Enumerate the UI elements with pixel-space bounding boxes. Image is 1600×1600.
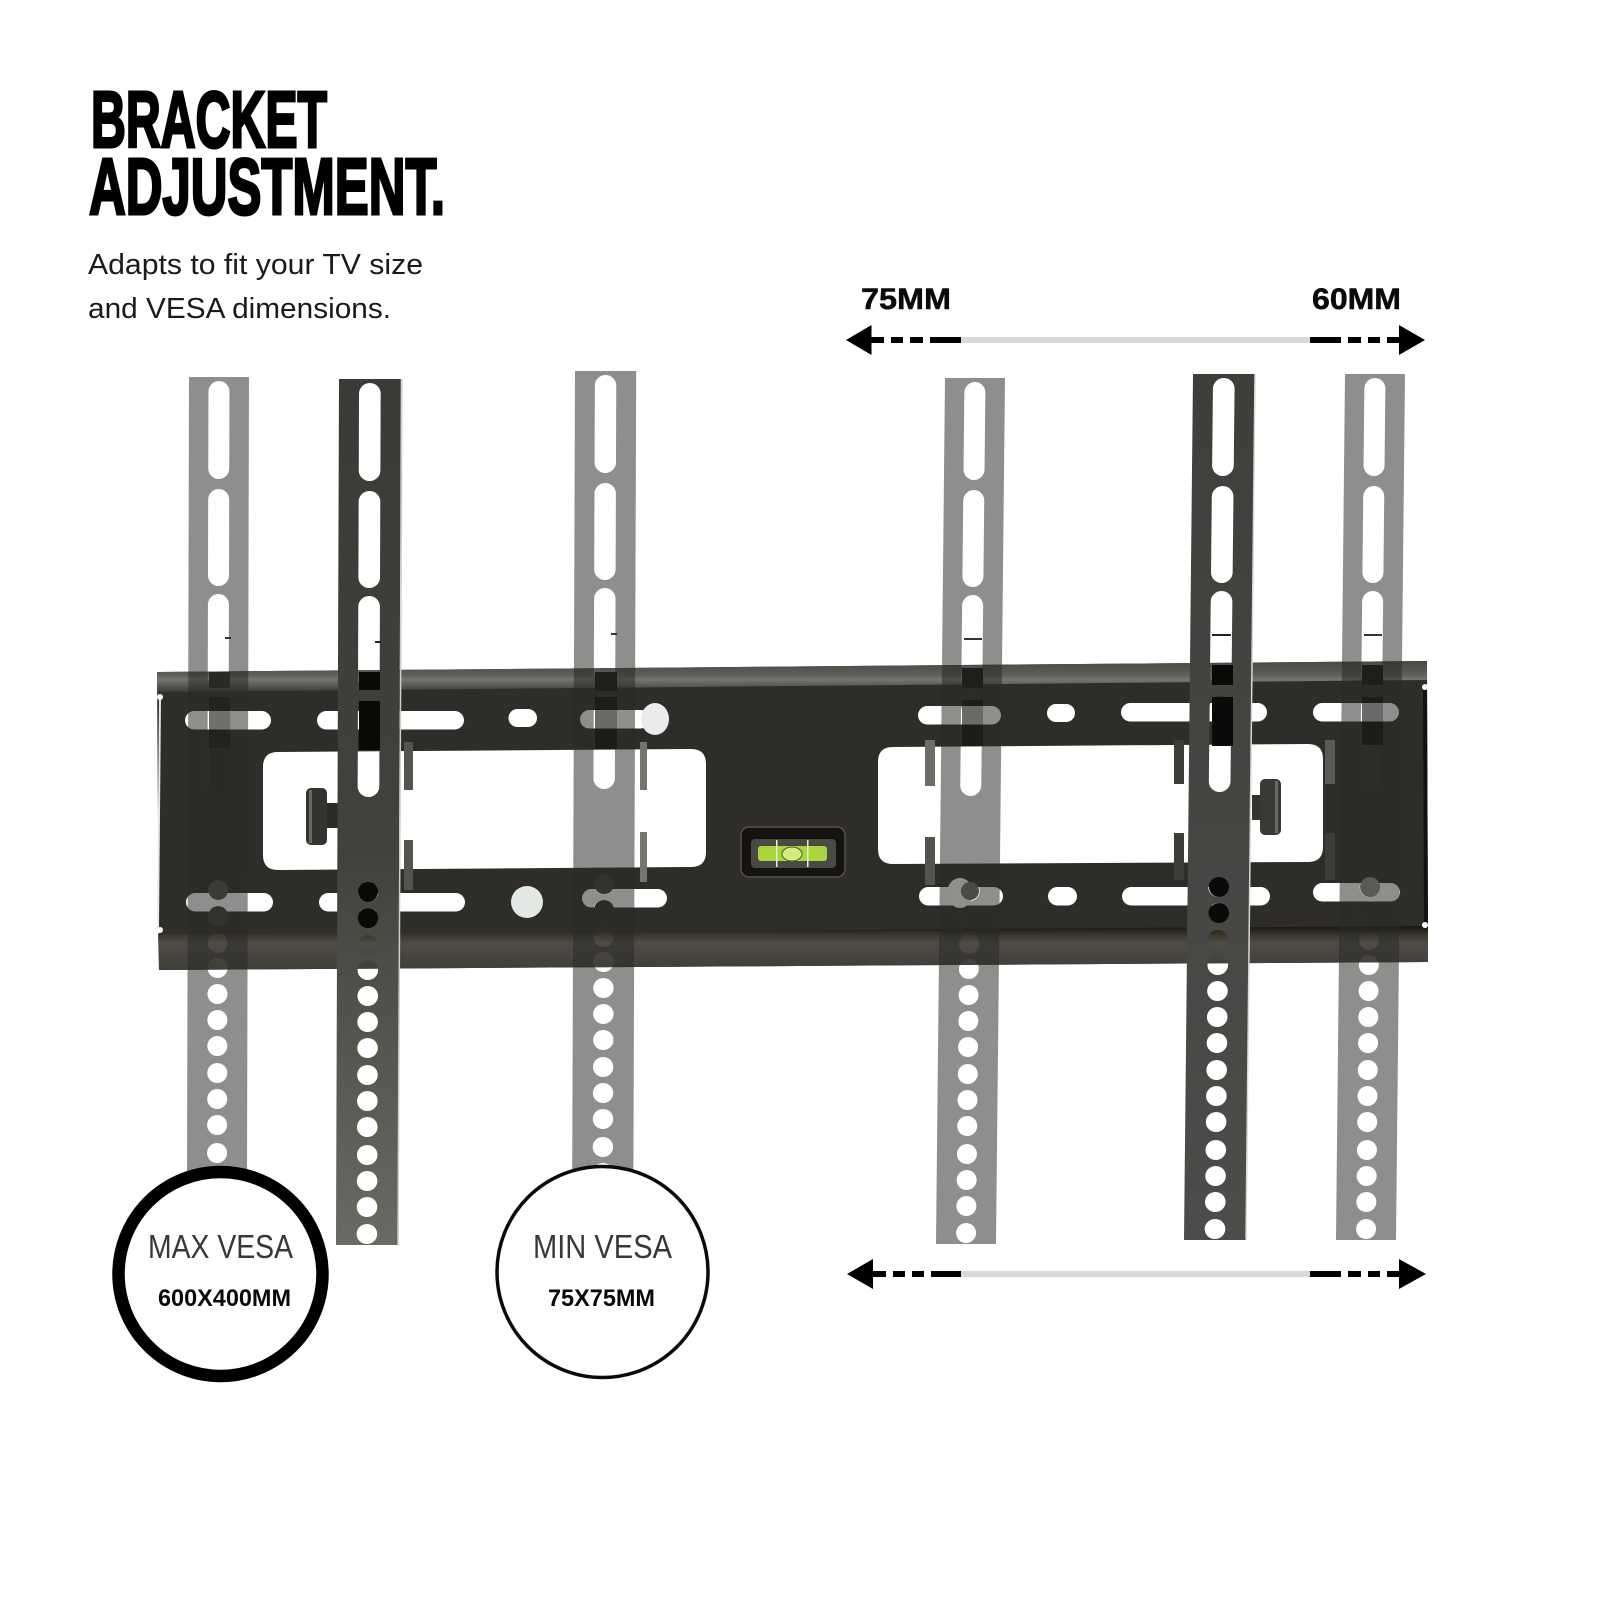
mounting slots bbox=[185, 703, 1400, 912]
plate corner notches bbox=[157, 684, 1428, 933]
mounting arm: left, max position solid bbox=[336, 379, 402, 1246]
left window bbox=[263, 749, 706, 870]
callout: max vesa: 600X400MM bbox=[158, 1285, 291, 1312]
spirit level bbox=[741, 827, 845, 877]
callout: min vesa: MIN VESA bbox=[533, 1228, 672, 1265]
title bbox=[89, 75, 445, 231]
tilt tabs bbox=[404, 740, 1335, 890]
title: BRACKET bbox=[91, 75, 327, 164]
wall plate bbox=[157, 661, 1428, 970]
screw: ghost bbox=[947, 878, 979, 908]
subtitle text: and VESA dimensions. bbox=[88, 293, 391, 325]
callout: max vesa bbox=[118, 1172, 322, 1376]
callout: min vesa bbox=[497, 1166, 708, 1378]
mounting arm: right side solid bbox=[1184, 374, 1255, 1240]
mounting arm: centre, min position ghost bbox=[572, 371, 636, 1237]
label: 60mm: 60MM bbox=[1312, 283, 1401, 316]
plate bottom lip bbox=[158, 926, 1428, 970]
title: ADJUSTMENT. bbox=[89, 142, 445, 231]
screw: lower bbox=[511, 886, 543, 918]
callout: max vesa: MAX VESA bbox=[148, 1228, 293, 1265]
right window bbox=[878, 744, 1323, 864]
screw: upper bbox=[641, 703, 669, 735]
plate left edge bbox=[158, 697, 160, 930]
plate top lip bbox=[157, 661, 1427, 692]
plate right edge bbox=[1425, 688, 1426, 925]
arrow: top double arrow bbox=[846, 325, 1425, 355]
mounting arm: far right ghost, 60mm bbox=[1336, 374, 1405, 1240]
subtitle text: Adapts to fit your TV size bbox=[88, 249, 423, 281]
tilt knob: left bbox=[306, 788, 341, 845]
label: 75mm: 75MM bbox=[861, 283, 951, 316]
callout: min vesa: 75X75MM bbox=[548, 1285, 655, 1312]
arrow: bottom double arrow bbox=[847, 1259, 1426, 1289]
mounting arm: far left, max position ghost bbox=[187, 377, 249, 1243]
tilt knob: right bbox=[1252, 779, 1281, 835]
subtitle text bbox=[88, 249, 423, 325]
mounting arm: right side ghost, 75mm bbox=[936, 378, 1005, 1244]
